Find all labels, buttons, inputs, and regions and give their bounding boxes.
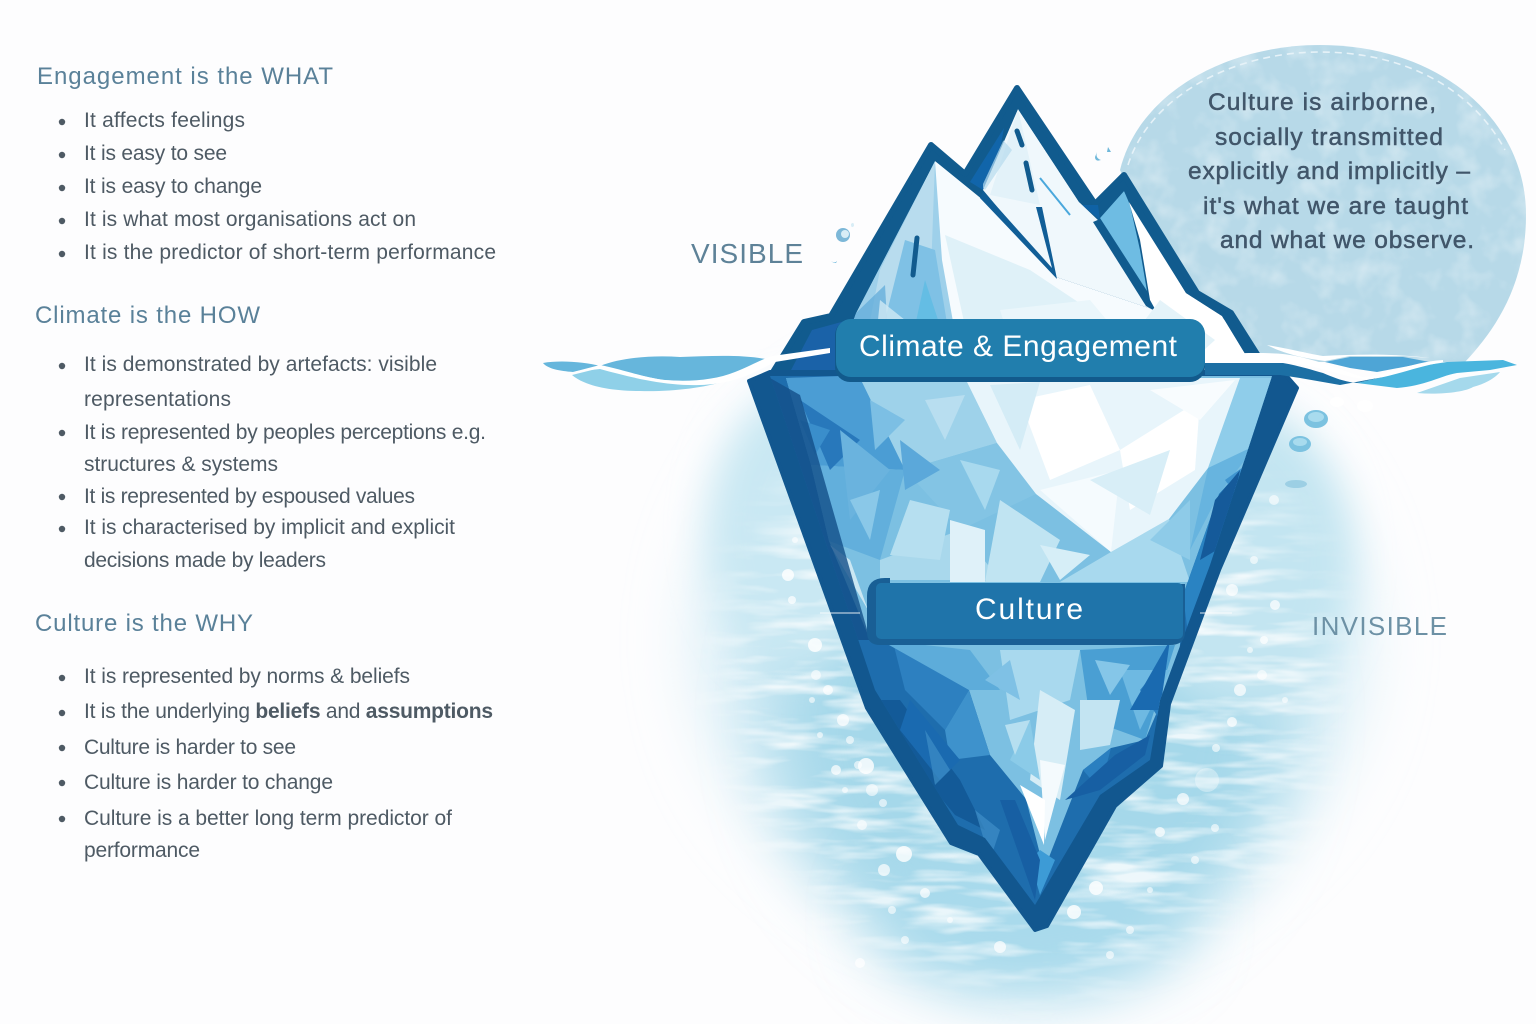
panel: climate <box>35 302 486 572</box>
list: engagement bullets: It is the predictor of short-term performance <box>84 241 496 264</box>
panel: culture <box>35 610 493 862</box>
cloud text: explicitly and implicitly – <box>1188 158 1470 185</box>
iceberg <box>749 88 1300 930</box>
list: culture bullets: It is the underlying beliefs and assumptions <box>84 700 493 723</box>
label box: culture <box>820 578 1232 645</box>
list: engagement bullets <box>59 109 496 264</box>
facets <box>786 375 905 470</box>
list: climate bullets: structures & systems <box>84 453 278 476</box>
list: climate bullets: decisions made by leaders <box>84 549 326 572</box>
speech cloud: culture is airborne <box>1120 45 1526 362</box>
above water ice <box>854 109 1245 370</box>
cloud text: it's what we are taught <box>1203 193 1468 220</box>
list: culture bullets: Culture is harder to change <box>84 771 333 794</box>
list: engagement bullets: It is easy to change <box>84 175 262 198</box>
list: culture bullets: Culture is harder to see <box>84 736 296 759</box>
below water ice <box>770 376 1272 905</box>
droplets near visible <box>831 223 854 263</box>
label box: climate & engagement: Climate & Engagement <box>859 330 1178 363</box>
cloud text <box>1188 89 1474 254</box>
waterline: left wave <box>543 348 830 391</box>
above water outline <box>770 88 1267 377</box>
waterline: right wave <box>1205 345 1517 394</box>
inner crack lines <box>980 191 1057 279</box>
cloud text: Culture is airborne, <box>1208 89 1436 116</box>
list: culture bullets: performance <box>84 839 200 862</box>
panel: engagement <box>37 63 496 264</box>
label box: culture: Culture <box>975 593 1083 626</box>
label: invisible: INVISIBLE <box>1312 611 1447 641</box>
list: culture bullets: Culture is a better long term predictor of <box>84 807 452 830</box>
iceberg: above water <box>770 88 1267 380</box>
list: culture bullets <box>59 665 493 862</box>
list: engagement bullets: It is what most organisations act on <box>84 208 416 231</box>
cloud text: socially transmitted <box>1215 124 1443 151</box>
heading: Engagement is the WHAT: Engagement is the WHAT <box>37 63 333 90</box>
droplets near peak <box>1095 147 1111 161</box>
list: culture bullets: It is represented by norms & beliefs <box>84 665 410 688</box>
cloud text: and what we observe. <box>1220 227 1474 254</box>
list: engagement bullets: It affects feelings <box>84 109 245 132</box>
label: visible: VISIBLE <box>691 238 803 269</box>
list: engagement bullets: It is easy to see <box>84 142 227 165</box>
list: climate bullets: It is demonstrated by artefacts: visible <box>84 353 437 376</box>
list: climate bullets <box>59 353 486 572</box>
water wash behind iceberg <box>674 390 1388 1024</box>
below water outline <box>749 372 1297 930</box>
list: climate bullets: It is represented by peoples perceptions e.g. <box>84 421 486 444</box>
list: climate bullets: It is represented by espoused values <box>84 485 415 508</box>
label box: climate & engagement <box>835 319 1205 382</box>
heading: Culture is the WHY: Culture is the WHY <box>35 610 253 637</box>
list: climate bullets: representations <box>84 388 231 411</box>
iceberg: below water <box>749 372 1300 930</box>
heading: Climate is the HOW: Climate is the HOW <box>35 302 260 329</box>
bubbles right of iceberg <box>1285 397 1373 488</box>
list: climate bullets: It is characterised by implicit and explicit <box>84 516 455 539</box>
